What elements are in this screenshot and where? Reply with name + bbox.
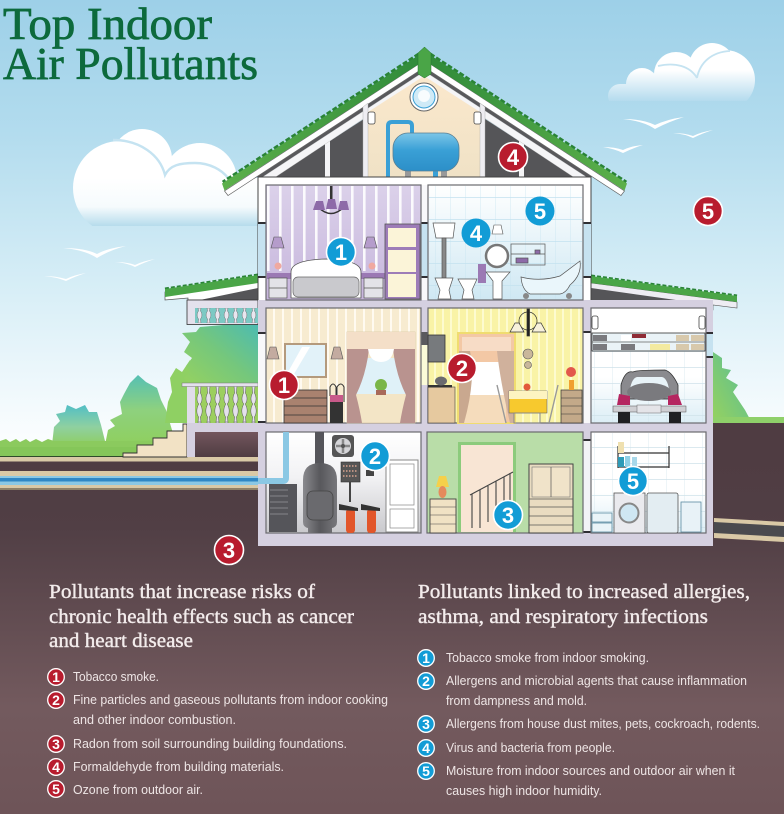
door xyxy=(385,224,420,299)
water pipes xyxy=(388,122,412,177)
number marker: red 2 kitchen xyxy=(448,354,476,382)
porch: lower xyxy=(182,383,258,457)
heading: allergy pollutants xyxy=(418,581,750,628)
list item 2: and other indoor combustion. xyxy=(73,713,236,727)
attic window xyxy=(410,83,438,111)
ventilation fan xyxy=(332,435,354,457)
heading: chronic health pollutants: and heart disease xyxy=(49,630,193,652)
toilet xyxy=(433,223,455,299)
window with curtains xyxy=(347,332,415,423)
list item 3: 3 xyxy=(422,716,430,732)
attic posts xyxy=(363,103,485,177)
chandelier xyxy=(510,309,546,336)
number marker: blue 5 laundry: 5 xyxy=(627,469,639,494)
list item 2: 2 xyxy=(422,673,430,689)
stairs xyxy=(123,424,187,457)
stair railing xyxy=(470,472,513,528)
bushes xyxy=(52,322,752,445)
list item 1: Tobacco smoke from indoor smoking. xyxy=(446,651,649,665)
list item 3: 3 xyxy=(52,736,60,752)
list item 5: Moisture from indoor sources and outdoor air when it xyxy=(446,764,736,778)
dryer xyxy=(647,493,678,533)
water tank xyxy=(393,133,459,177)
heading: allergy pollutants: asthma, and respiratory infections xyxy=(418,606,708,628)
stair doorway xyxy=(458,442,516,532)
door xyxy=(386,460,418,532)
list item 3: Allergens from house dust mites, pets, cockroach, rodents. xyxy=(446,717,760,731)
roof: right lower xyxy=(591,276,737,310)
house shell xyxy=(258,177,713,546)
number marker: blue 5 bathroom: 5 xyxy=(534,199,546,224)
list item 5: 5 xyxy=(52,781,60,797)
birds: left group xyxy=(44,246,155,281)
list item 1: Tobacco smoke. xyxy=(73,670,159,684)
number marker: blue 4 bathroom xyxy=(462,218,490,248)
list item 2: 2 xyxy=(52,692,60,708)
furnace flue xyxy=(315,432,324,464)
wall lamps xyxy=(592,316,705,329)
list item 2 xyxy=(418,673,747,708)
underground soil xyxy=(0,423,784,814)
room: bathroom xyxy=(428,185,583,300)
heading: allergy pollutants: Pollutants linked to increased allergies, xyxy=(418,581,750,603)
heading: chronic health pollutants: Pollutants that increase risks of xyxy=(49,581,315,603)
wall lamps xyxy=(271,237,377,248)
sink xyxy=(486,272,510,299)
storage boxes xyxy=(592,513,612,532)
mirror xyxy=(486,225,508,267)
cloud: right xyxy=(608,43,755,100)
number marker: red 5 outdoor xyxy=(694,196,722,226)
list item 2: Fine particles and gaseous pollutants from indoor cooking xyxy=(73,693,388,707)
list item 5: Ozone from outdoor air. xyxy=(73,783,203,797)
list: chronic health pollutants xyxy=(48,669,388,797)
ridge cap xyxy=(418,47,431,78)
counter and pot xyxy=(428,376,455,423)
bin xyxy=(681,502,701,532)
buried pipe: right xyxy=(714,518,784,542)
number marker: red 4 roof xyxy=(498,142,528,172)
towel xyxy=(478,264,486,283)
list item 5: causes high indoor humidity. xyxy=(446,784,602,798)
wall plates xyxy=(523,349,533,368)
number marker: red 4 roof: 4 xyxy=(507,145,520,170)
roof: left lower xyxy=(165,275,258,301)
shelf with bottles xyxy=(618,442,669,468)
list item 2: Allergens and microbial agents that cause inflammation xyxy=(446,674,747,688)
attic wall lamps xyxy=(368,112,481,124)
sky background xyxy=(0,0,784,450)
washing machine xyxy=(614,493,645,533)
extinguishers xyxy=(339,504,380,533)
number marker: blue 3 stairs: 3 xyxy=(502,503,514,528)
list item 5 xyxy=(418,763,736,798)
number marker: blue 5 laundry xyxy=(618,466,648,496)
birds: right group xyxy=(603,117,713,153)
list item 2: from dampness and mold. xyxy=(446,694,587,708)
number marker: red 1 living room xyxy=(270,370,298,400)
attic wall xyxy=(368,76,480,177)
cabinet xyxy=(529,464,573,533)
inlet pipe xyxy=(258,432,286,481)
number marker: blue 4 bathroom: 4 xyxy=(470,221,483,246)
lamp xyxy=(436,476,449,498)
number marker: blue 2 basement xyxy=(360,442,390,470)
number marker: blue 1 bedroom xyxy=(326,238,356,266)
control panel xyxy=(341,462,374,502)
room: laundry xyxy=(591,432,706,533)
title: Air Pollutants xyxy=(3,38,258,89)
list item 1: 1 xyxy=(52,669,60,685)
room: garage xyxy=(591,308,706,423)
number marker: red 3 soil xyxy=(214,536,244,564)
list item 4: Formaldehyde from building materials. xyxy=(73,760,284,774)
list item 4: 4 xyxy=(422,740,430,756)
dining table and chairs xyxy=(497,384,558,423)
mirror xyxy=(285,344,326,377)
number marker: red 1 living room: 1 xyxy=(278,373,290,398)
number marker: blue 3 stairs xyxy=(494,500,522,530)
number marker: blue 1 bedroom: 1 xyxy=(335,240,347,265)
dresser xyxy=(284,390,327,423)
room: living room xyxy=(266,308,421,423)
car xyxy=(613,370,686,423)
number marker: red 3 soil: 3 xyxy=(223,538,235,563)
list item 3: Radon from soil surrounding building foundations. xyxy=(73,737,347,751)
range hood xyxy=(428,335,445,362)
list: allergy pollutants xyxy=(418,650,760,798)
wall lamps xyxy=(267,347,343,359)
cloud: left xyxy=(73,129,260,235)
drawers and flowers xyxy=(561,367,582,423)
shelf xyxy=(511,244,545,265)
heading: chronic health pollutants xyxy=(49,581,354,652)
wall windows xyxy=(258,224,713,357)
list item 4: Virus and bacteria from people. xyxy=(446,741,615,755)
flowers xyxy=(274,262,376,270)
radiator xyxy=(269,484,297,532)
number marker: red 5 outdoor: 5 xyxy=(702,199,714,224)
umbrella stand xyxy=(330,384,344,423)
room: stair hall xyxy=(427,432,583,533)
porch: upper balcony xyxy=(187,300,258,324)
roof: main gable xyxy=(222,47,627,196)
list item 5: 5 xyxy=(422,763,430,779)
title xyxy=(3,0,258,89)
list item 2 xyxy=(48,692,388,727)
list item 4: 4 xyxy=(52,759,60,775)
room: bedroom xyxy=(266,185,421,300)
grass xyxy=(0,417,784,457)
room: basement utility xyxy=(258,432,421,533)
ground layers and buried water pipe xyxy=(0,457,285,490)
room: kitchen xyxy=(428,308,583,423)
number marker: blue 5 bathroom xyxy=(526,196,554,226)
chandelier xyxy=(313,186,349,214)
bedside drawers xyxy=(430,499,456,533)
number marker: red 2 kitchen: 2 xyxy=(456,356,468,381)
storage shelves xyxy=(592,333,705,351)
window with curtains xyxy=(458,333,515,423)
list item 1: 1 xyxy=(422,650,430,666)
bathtub xyxy=(521,261,580,294)
bed xyxy=(291,259,361,298)
bidet xyxy=(458,279,477,299)
list item 1 xyxy=(48,669,159,685)
number marker: blue 2 basement: 2 xyxy=(369,444,381,469)
heading: chronic health pollutants: chronic health effects such as cancer xyxy=(49,606,354,628)
furnace xyxy=(303,463,337,533)
nightstands xyxy=(269,278,383,298)
